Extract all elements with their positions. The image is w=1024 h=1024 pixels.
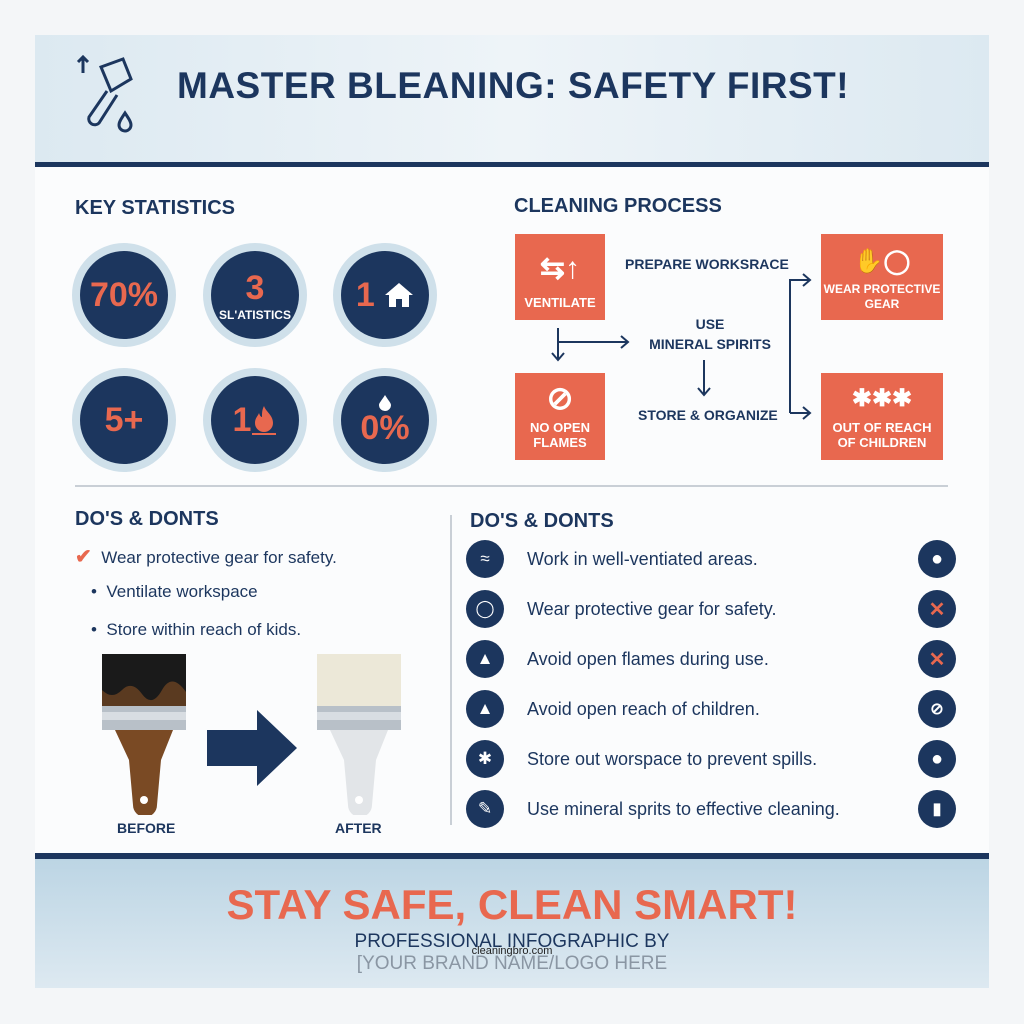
heading: dos and donts right: DO'S & DONTS xyxy=(470,510,614,532)
stat: 70% xyxy=(72,243,176,347)
checklist xyxy=(75,546,337,639)
list rows: Work in well-ventiated areas. xyxy=(527,549,758,569)
list rows: ⊘ xyxy=(930,701,944,718)
list rows: ✕ xyxy=(929,598,945,620)
heading: cleaning process: CLEANING PROCESS xyxy=(514,195,722,217)
footer credit xyxy=(355,931,669,974)
list rows: Avoid open flames during use. xyxy=(527,649,769,669)
box: no open flames: NO OPEN xyxy=(530,420,590,435)
label: prepare: PREPARE WORKSRACE xyxy=(625,256,789,272)
arrows xyxy=(551,273,812,420)
label: use mineral spirits: MINERAL SPIRITS xyxy=(649,336,771,352)
stat: 0%: 0% xyxy=(360,409,410,447)
box: ventilate: VENTILATE xyxy=(524,295,596,310)
icon: paint brush xyxy=(77,55,133,132)
box: no open flames: FLAMES xyxy=(533,435,587,450)
before/after illustration xyxy=(102,654,401,836)
before/after illustration: BEFORE xyxy=(117,820,175,836)
list rows: ▲ xyxy=(477,649,493,668)
box: wear protective gear: WEAR PROTECTIVE xyxy=(824,282,940,296)
stat: 3 statistics: SL'ATISTICS xyxy=(219,308,291,322)
box: wear protective gear: GEAR xyxy=(865,297,899,311)
stat: 1 home xyxy=(333,243,437,347)
box: out of reach: OUT OF REACH xyxy=(833,420,931,435)
list rows: Store out worspace to prevent spills. xyxy=(527,749,817,769)
list rows: ≈ xyxy=(480,549,490,568)
footer credit: [YOUR BRAND NAME/LOGO HERE xyxy=(357,953,667,974)
box: wear protective gear: ✋◯ xyxy=(854,248,910,275)
box: ventilate: ⇆↑ xyxy=(540,252,580,285)
box: out of reach: ✱✱✱ xyxy=(852,385,912,412)
box: wear protective gear xyxy=(821,234,943,320)
box: ventilate xyxy=(515,234,605,320)
label: use mineral spirits xyxy=(649,316,771,352)
checklist: • Ventilate workspace xyxy=(91,582,258,601)
label: use mineral spirits: USE xyxy=(696,316,724,332)
list rows: Wear protective gear for safety. xyxy=(527,599,776,619)
stat: 3 statistics xyxy=(203,243,307,347)
list rows xyxy=(466,540,956,828)
title: MASTER BLEANING: SAFETY FIRST! xyxy=(177,65,849,106)
stat: 70%: 70% xyxy=(90,276,158,314)
before/after illustration: AFTER xyxy=(335,820,382,836)
box: out of reach xyxy=(821,373,943,460)
list rows: Avoid open reach of children. xyxy=(527,699,760,719)
stat: 5+ xyxy=(72,368,176,472)
stat: 5+: 5+ xyxy=(105,400,143,438)
footer band xyxy=(35,859,989,988)
box: no open flames xyxy=(515,373,605,460)
list rows: ✎ xyxy=(478,799,492,818)
footer credit: PROFESSIONAL INFOGRAPHIC BY xyxy=(355,931,669,952)
box: out of reach: OF CHILDREN xyxy=(838,435,926,450)
list rows: ✕ xyxy=(929,648,945,670)
header band xyxy=(35,35,989,163)
stat: 1 fire xyxy=(203,368,307,472)
list rows: ◯ xyxy=(475,599,495,618)
stat: 3 statistics: 3 xyxy=(246,268,264,306)
footer band: cleaningbro.com xyxy=(472,945,552,957)
stat: 1 fire: 1 xyxy=(233,400,251,438)
stats circles xyxy=(72,243,437,472)
checklist: ✔ Wear protective gear for safety. xyxy=(75,546,337,568)
heading: dos and donts left: DO'S & DONTS xyxy=(75,508,219,530)
label: store: STORE & ORGANIZE xyxy=(638,407,778,423)
list rows: ● xyxy=(931,748,943,770)
list rows: ✱ xyxy=(478,749,492,768)
list rows: ▲ xyxy=(477,699,493,718)
flow chart xyxy=(515,234,943,460)
stat: 1 home: 1 xyxy=(356,276,375,314)
footer slogan: STAY SAFE, CLEAN SMART! xyxy=(227,881,797,928)
box: no open flames: ⊘ xyxy=(547,380,573,416)
stat: 0% xyxy=(333,368,437,472)
list rows: ▮ xyxy=(933,801,941,818)
list rows: ● xyxy=(931,548,943,570)
checklist: • Store within reach of kids. xyxy=(91,620,301,639)
heading: key statistics: KEY STATISTICS xyxy=(75,197,235,219)
list rows: Use mineral sprits to effective cleaning. xyxy=(527,799,840,819)
